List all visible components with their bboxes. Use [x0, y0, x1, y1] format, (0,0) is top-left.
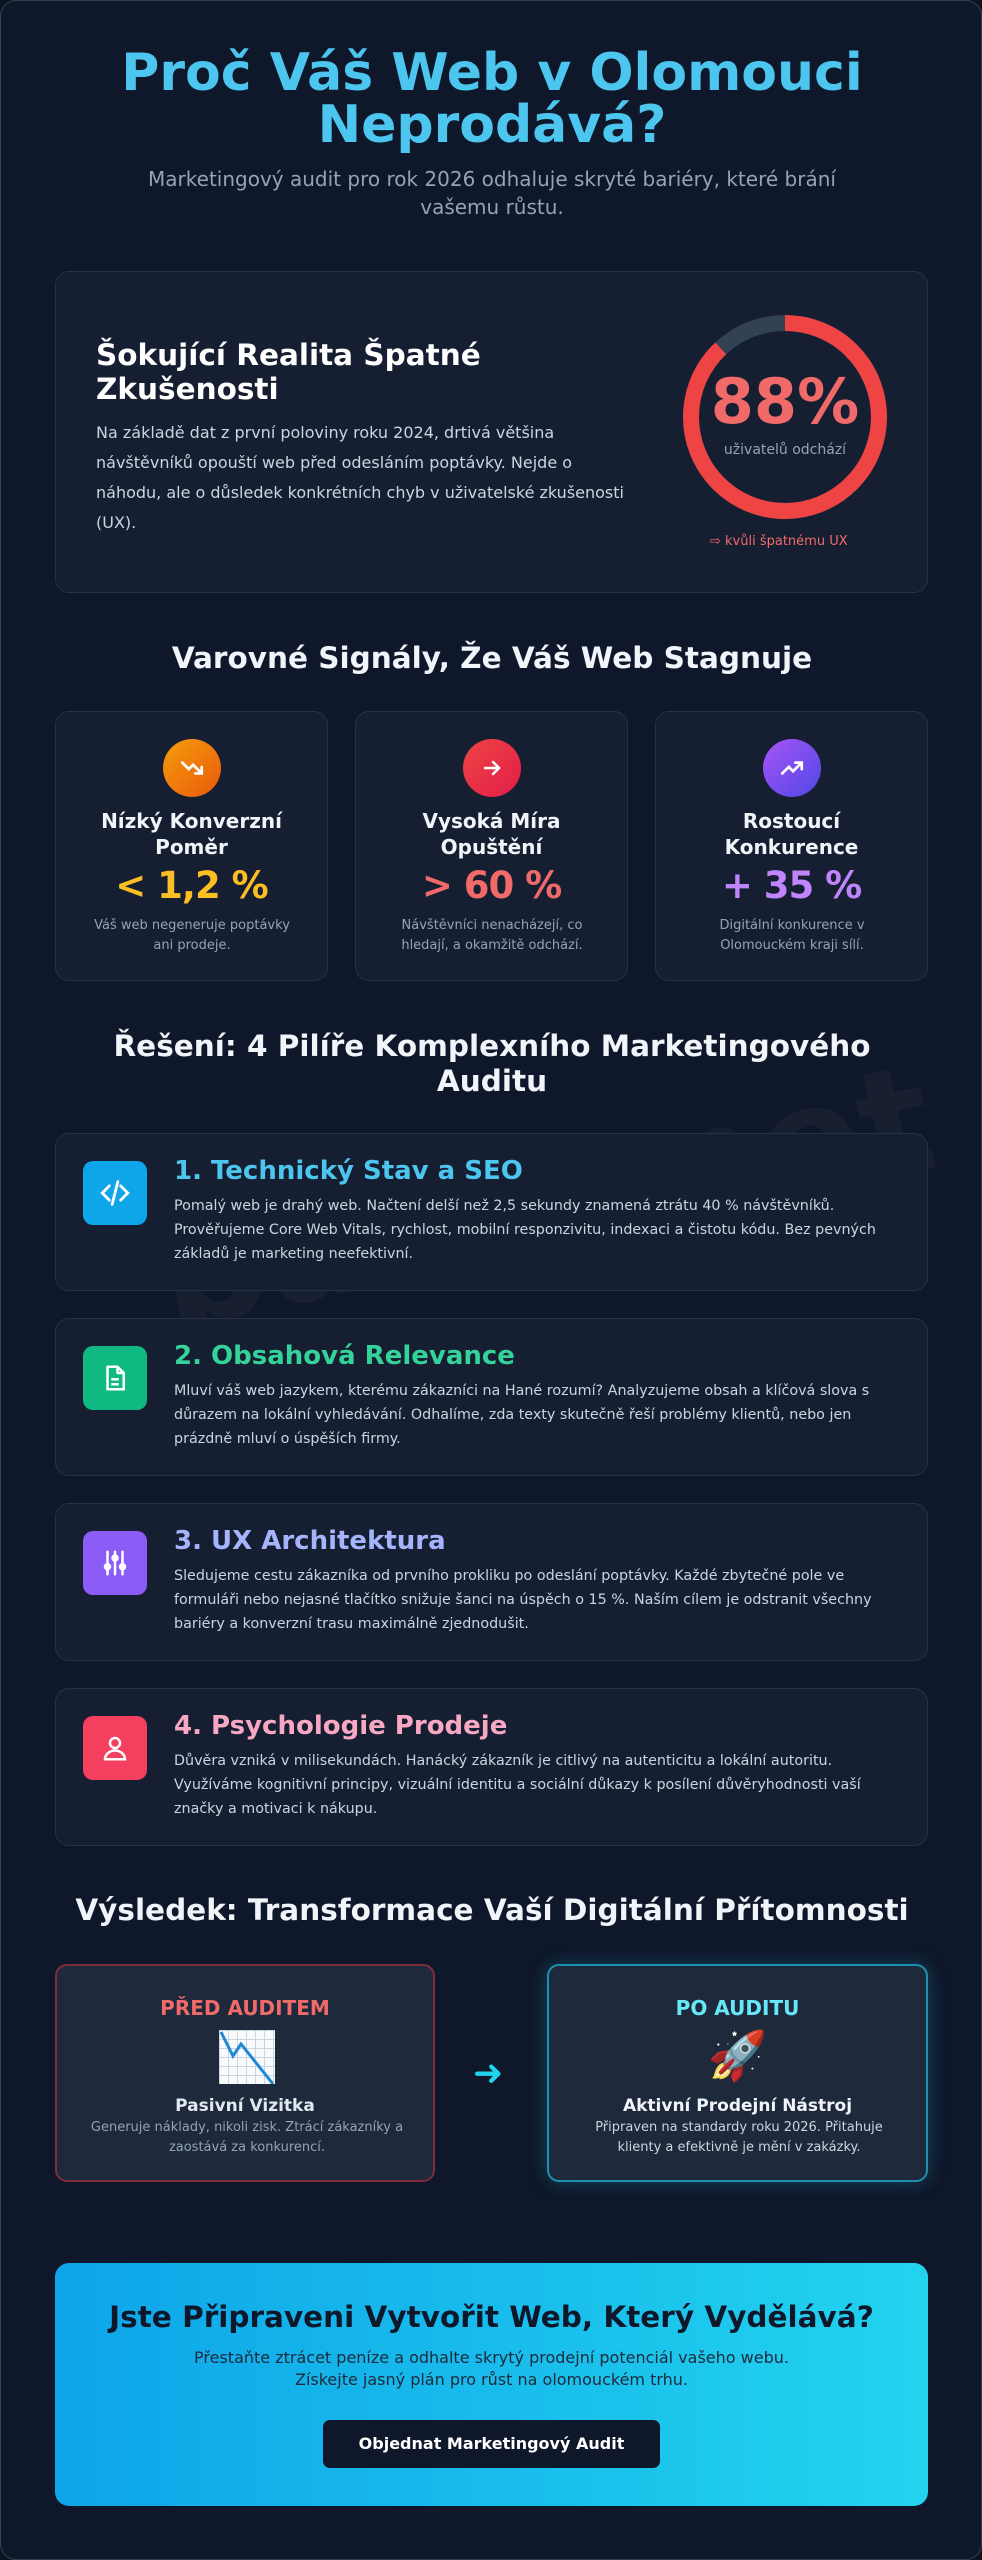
- icon: [763, 739, 821, 797]
- icon: document: [83, 1346, 147, 1410]
- pillar 1: Pomalý web je drahý web. Načtení delší než 2,5 sekundy znamená ztrátu 40 % návštěvníků. Prověřujeme Core Web Vitals, rychlost, mobilní responzivitu, indexaci a čistotu kódu. Bez pevných základů je marketing neefektivní.: [174, 1198, 876, 1262]
- card: competition: Digitální konkurence v Olomouckém kraji sílí.: [719, 918, 865, 953]
- pillar 3: [55, 1503, 928, 1661]
- heading: Šokující Realita Špatné Zkušenosti: [96, 338, 481, 406]
- pillar 4: 4. Psychologie Prodeje: [174, 1711, 507, 1741]
- panel: before: PŘED AUDITEM: [160, 1996, 330, 2020]
- panel: after: Připraven na standardy roku 2026. Přitahuje klienty a efektivně je mění v zakázky.: [595, 2120, 883, 2155]
- caption: ⇨ kvůli špatnému UX: [710, 534, 848, 549]
- card: conversion: Poměr: [155, 835, 228, 859]
- pillar 2: 2. Obsahová Relevance: [174, 1341, 515, 1371]
- card: competition: + 35 %: [722, 864, 861, 907]
- pillar 2: Mluví váš web jazykem, kterému zákazníci na Hané rozumí? Analyzujeme obsah a klíčová slova s důrazem na lokální vyhledávání. Odhalíme, zda texty skutečně řeší problémy klientů, nebo jen prázdně mluví o úspěších firmy.: [174, 1383, 869, 1447]
- title: [121, 43, 863, 155]
- icon: [463, 739, 521, 797]
- title: Neprodává?: [318, 95, 666, 155]
- card: competition: [655, 711, 928, 981]
- icon: code: [83, 1161, 147, 1225]
- card: conversion: Váš web negeneruje poptávky ani prodeje.: [94, 918, 290, 953]
- button: Objednat Marketingový Audit: [359, 2434, 624, 2453]
- card: bounce: Vysoká Míra: [422, 809, 561, 833]
- panel: after: PO AUDITU: [676, 1996, 799, 2020]
- donut chart: [683, 315, 887, 519]
- heading: solution: Řešení: 4 Pilíře Komplexního Marketingového Auditu: [113, 1029, 871, 1098]
- pillar 4: [55, 1688, 928, 1846]
- card: competition: Rostoucí: [743, 809, 840, 833]
- card: competition: Konkurence: [725, 835, 858, 859]
- heading: result: Výsledek: Transformace Vaší Digitální Přítomnosti: [75, 1893, 909, 1927]
- donut chart: 88%: [711, 365, 859, 438]
- icon: rocket: 🚀: [708, 2028, 767, 2084]
- pillar 3: 3. UX Architektura: [174, 1526, 446, 1556]
- panel: shocking reality: [55, 271, 928, 593]
- title: Proč Váš Web v Olomouci: [121, 43, 863, 103]
- icon: chart down: [219, 2030, 275, 2084]
- arrow: ➜: [473, 2053, 503, 2094]
- panel: before: Pasivní Vizitka: [175, 2096, 315, 2116]
- card: conversion: Nízký Konverzní: [101, 809, 282, 833]
- text block: Na základě dat z první poloviny roku 2024, drtivá většina návštěvníků opouští web před odesláním poptávky. Nejde o náhodu, ale o důsledek konkrétních chyb v uživatelské zkušenosti (UX).: [96, 423, 624, 532]
- icon: sliders: [83, 1531, 147, 1595]
- card: bounce: Opuštění: [441, 835, 542, 859]
- icon: [163, 739, 221, 797]
- pillar 1: 1. Technický Stav a SEO: [174, 1156, 523, 1186]
- CTA: Jste Připraveni Vytvořit Web, Který Vydělává?: [109, 2300, 874, 2334]
- CTA: Přestaňte ztrácet peníze a odhalte skrytý prodejní potenciál vašeho webu.: [194, 2348, 789, 2367]
- card: bounce: Návštěvníci nenacházejí, co hledají, a okamžitě odchází.: [401, 918, 583, 953]
- card: conversion: [55, 711, 328, 981]
- icon: person: [83, 1716, 147, 1780]
- donut chart: uživatelů odchází: [724, 442, 847, 458]
- CTA: Získejte jasný plán pro růst na olomouckém trhu.: [295, 2370, 688, 2389]
- panel: after: [547, 1964, 928, 2182]
- pillar 1: [55, 1133, 928, 1291]
- pillar 3: Sledujeme cestu zákazníka od prvního prokliku po odeslání poptávky. Každé zbytečné pole ve formuláři nebo nejasné tlačítko snižuje šanci na úspěch o 15 %. Naším cílem je odstranit všechny bariéry a konverzní trasu maximálně zjednodušit.: [174, 1568, 872, 1632]
- panel: after: Aktivní Prodejní Nástroj: [623, 2096, 852, 2116]
- card: bounce: > 60 %: [422, 864, 561, 907]
- button: [323, 2420, 660, 2468]
- CTA: [55, 2263, 928, 2506]
- panel: before: [55, 1964, 435, 2182]
- pillar 2: [55, 1318, 928, 1476]
- card: bounce: [355, 711, 628, 981]
- panel: before: Generuje náklady, nikoli zisk. Ztrácí zákazníky a zaostává za konkurencí.: [91, 2120, 403, 2155]
- card: conversion: < 1,2 %: [115, 864, 268, 907]
- heading: warning signals: Varovné Signály, Že Váš Web Stagnuje: [172, 641, 812, 675]
- watermark: palec.net: [142, 1031, 948, 1365]
- subtitle: Marketingový audit pro rok 2026 odhaluje skryté bariéry, které brání vašemu růstu.: [148, 167, 836, 219]
- pillar 4: Důvěra vzniká v milisekundách. Hanácký zákazník je citlivý na autenticitu a lokální autoritu. Využíváme kognitivní principy, vizuální identitu a sociální důkazy k posílení důvěryhodnosti vaší značky a motivaci k nákupu.: [174, 1753, 861, 1817]
